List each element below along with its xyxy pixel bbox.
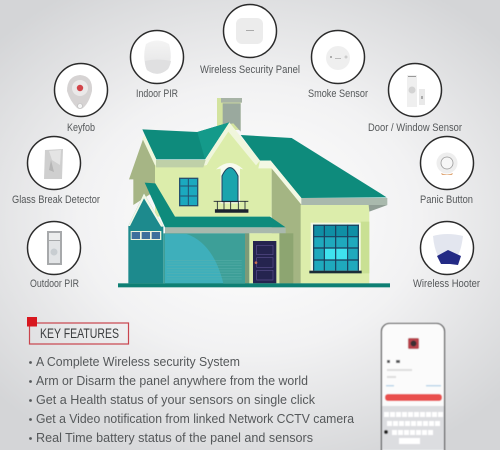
label: wireless security panel: Wireless Security Panel [200, 64, 300, 76]
icon: indoor PIR [130, 30, 184, 84]
label: indoor PIR: Indoor PIR [136, 88, 178, 100]
gable roof [142, 122, 260, 167]
icon: smoke sensor [312, 30, 364, 84]
label: outdoor PIR: Outdoor PIR [30, 278, 79, 290]
ground [118, 283, 390, 287]
icon: outdoor PIR [28, 222, 80, 274]
login button [385, 394, 442, 401]
balcony [214, 201, 248, 212]
phone mockup [382, 324, 444, 450]
icon: keyfob [54, 64, 108, 116]
label: door window sensor: Door / Window Sensor [368, 122, 462, 134]
feature 4: Get a Video notification from linked Network CCTV camera [36, 411, 355, 426]
upper window [179, 178, 198, 206]
app logo [408, 338, 419, 349]
form fields [387, 360, 400, 363]
large window [309, 223, 362, 273]
upper wall [155, 125, 272, 217]
lower roof [145, 183, 286, 233]
chimney [217, 98, 242, 132]
garage door [163, 233, 249, 283]
porch column and door [249, 233, 293, 283]
icon: panic button [420, 136, 474, 190]
feature 2: Arm or Disarm the panel anywhere from the world [36, 373, 308, 388]
feature 3: Get a Health status of your sensors on single click [36, 392, 315, 407]
left side wall shadow [129, 138, 157, 205]
label: glass break detector: Glass Break Detector [12, 194, 100, 206]
feature list [29, 354, 355, 445]
icon: wireless hooter [420, 222, 474, 274]
label: smoke sensor: Smoke Sensor [308, 88, 368, 100]
icon: door window sensor [388, 64, 442, 116]
garage side [128, 193, 163, 283]
label: panic button: Panic Button [420, 194, 473, 206]
icon: glass break detector [28, 136, 80, 190]
main roof [241, 135, 387, 212]
keyboard [382, 406, 444, 450]
icon: wireless security panel [224, 4, 276, 58]
label: wireless hooter: Wireless Hooter [413, 278, 480, 290]
illustration: house [118, 98, 390, 287]
feature 5: Real Time battery status of the panel and sensors [36, 430, 313, 445]
feature 1: A Complete Wireless security System [36, 354, 240, 369]
main wall shaded side [272, 168, 302, 283]
label: keyfob: Keyfob [67, 122, 95, 134]
arched balcony window [216, 163, 243, 203]
right wall [301, 205, 369, 283]
bullets [29, 361, 32, 440]
heading: key features [27, 317, 128, 344]
heading: key features: KEY FEATURES [40, 325, 119, 341]
